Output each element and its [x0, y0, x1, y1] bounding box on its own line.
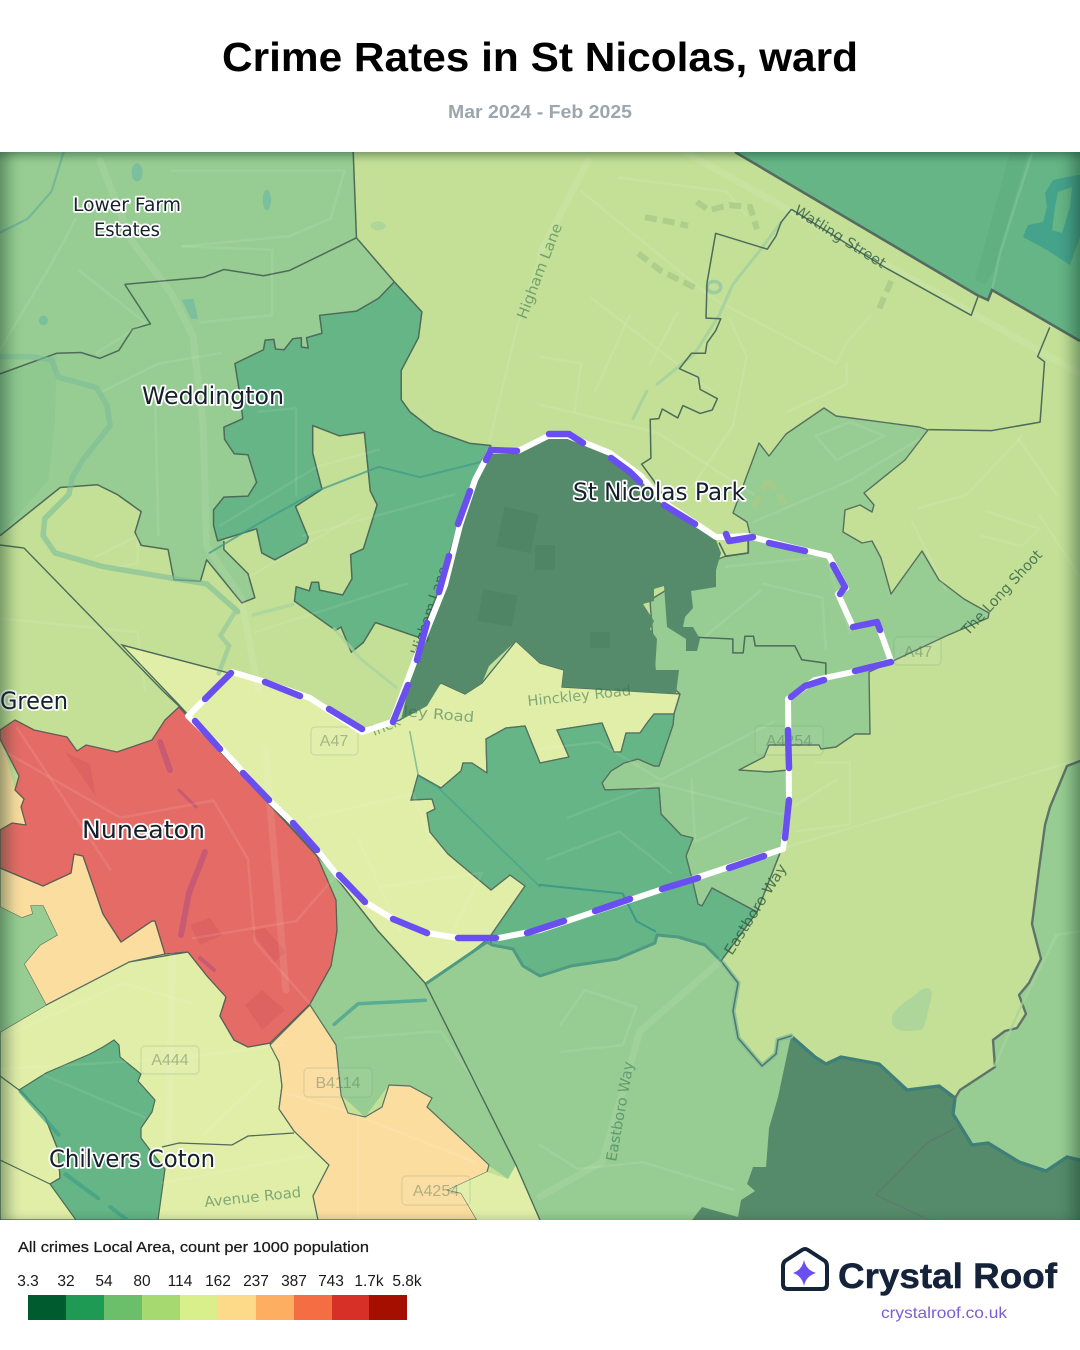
area: pale ward west [122, 641, 680, 985]
title block [222, 34, 858, 122]
road name labels: Higham Lane [515, 221, 566, 321]
place labels: St Nicolas Park [573, 478, 745, 506]
campus building strips [638, 202, 891, 508]
road shields: A47 [320, 733, 348, 750]
area: south-east darkest [692, 1036, 1080, 1220]
road name labels [204, 203, 1046, 1211]
road shields: A444 [151, 1052, 189, 1069]
area: pale south small [448, 1165, 540, 1220]
place labels: Chilvers Coton [49, 1145, 215, 1173]
streams and canal [0, 152, 1080, 1220]
area boundary lines [642, 209, 1050, 677]
legend values: 3.3 [17, 1273, 39, 1290]
road name labels: ley Road [403, 704, 475, 726]
area: Hinckley Road mid green [602, 408, 989, 912]
brand logo [781, 1247, 1058, 1322]
area: Nuneaton red [0, 707, 337, 1047]
area: south-west pale [0, 952, 329, 1220]
road name labels: Eastboro Way [722, 861, 791, 958]
area: Higham Lane darker green [214, 282, 491, 652]
road name labels: The Long Shoot [959, 547, 1046, 639]
area: east mid green [953, 761, 1080, 1171]
road shields: A4254 [413, 1183, 459, 1200]
place labels: Nuneaton [82, 816, 205, 844]
road network [0, 152, 1080, 1220]
legend values: 743 [318, 1273, 344, 1290]
area: orange south [270, 1005, 489, 1220]
legend colour scale [28, 1295, 407, 1320]
road shields: B4114 [315, 1075, 361, 1092]
area: Chilvers Coton green [19, 1040, 165, 1220]
area: orange west [0, 854, 165, 1005]
place labels: Estates [94, 219, 160, 241]
place labels [0, 194, 745, 1173]
legend [17, 1239, 422, 1320]
website: crystalroof.co.uk [881, 1305, 1008, 1322]
road name labels: Higham Lane [409, 565, 452, 657]
road shields: A47 [904, 644, 932, 661]
river through Nuneaton [160, 742, 214, 970]
area: west mid green [0, 906, 57, 1032]
legend values: 1.7k [354, 1273, 384, 1290]
legend values: 32 [57, 1273, 75, 1290]
ponds [39, 163, 386, 325]
area: south ward darker green [411, 714, 757, 976]
choropleth map [0, 152, 1080, 1220]
legend values: 114 [168, 1273, 193, 1290]
legend values: 80 [133, 1273, 151, 1290]
darker red patches [65, 752, 286, 1030]
wordmark: Crystal Roof [838, 1257, 1057, 1296]
area: St Nicolas darkest green [401, 436, 721, 720]
ward boundary: St Nicolas [188, 434, 891, 938]
area: north-east band [735, 152, 1080, 341]
area: Weddington [0, 147, 394, 603]
legend values: 162 [205, 1273, 231, 1290]
road name labels: Eastboro Way [604, 1060, 638, 1163]
icon: house with star [783, 1249, 827, 1289]
road shields: A4254 [766, 733, 812, 750]
area: diagonal strip mid green [310, 856, 516, 1179]
river boundary lines [427, 761, 1080, 1220]
legend values [17, 1273, 422, 1290]
base low-crime area [0, 152, 1080, 1220]
map edge shading [0, 152, 1080, 1220]
legend values: 237 [243, 1273, 269, 1290]
road name labels: Watling Street [791, 203, 889, 272]
place labels: Lower Farm [73, 194, 181, 216]
legend values: 54 [95, 1273, 113, 1290]
legend title: All crimes Local Area, count per 1000 population [18, 1239, 369, 1256]
road name labels: Avenue Road [204, 1185, 302, 1211]
legend values: 5.8k [392, 1273, 422, 1290]
road shields [141, 637, 941, 1205]
place labels: Green [0, 687, 68, 715]
heading: Crime Rates in St Nicolas, ward [222, 34, 858, 80]
buildings [477, 507, 610, 648]
place labels: Weddington [142, 382, 284, 410]
area: south central mid green [425, 935, 791, 1220]
legend values: 387 [281, 1273, 307, 1290]
date range subtitle: Mar 2024 - Feb 2025 [448, 102, 632, 122]
pond in field [892, 988, 932, 1031]
road name labels: inck [370, 713, 404, 740]
road name labels: Hinckley Road [527, 683, 632, 710]
